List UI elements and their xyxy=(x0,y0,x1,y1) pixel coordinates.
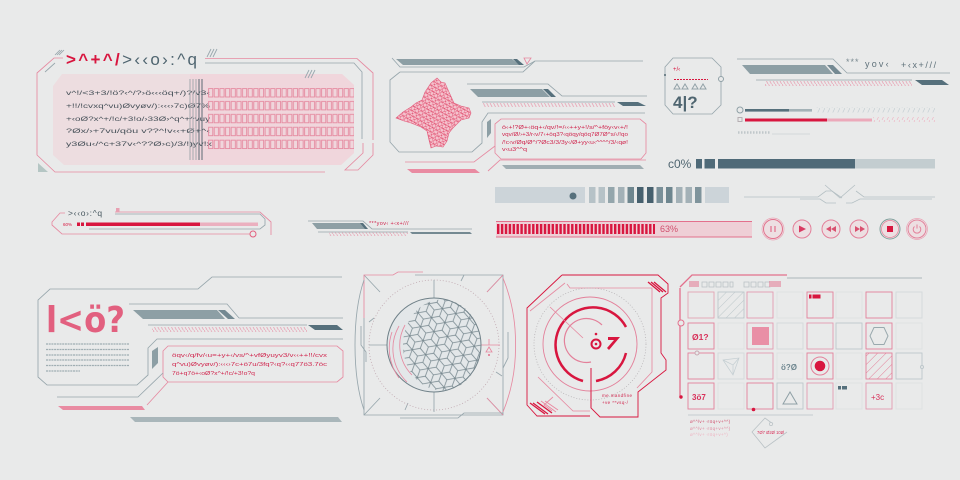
progress bar: 63 percent: 63% xyxy=(660,224,678,234)
caption xyxy=(602,393,633,405)
target icon xyxy=(592,333,600,348)
heading: >^+^/>‹‹o›:^q xyxy=(66,50,197,69)
marker xyxy=(486,339,492,356)
crossing connector lines xyxy=(744,185,935,203)
row 2 xyxy=(688,323,922,349)
button: rewind xyxy=(822,220,840,238)
progress bar: 60 percent: c0% xyxy=(668,157,692,171)
button: forward xyxy=(850,220,868,238)
callout text xyxy=(163,346,343,382)
thick arcs xyxy=(556,307,626,381)
panel: lower left readout xyxy=(38,277,343,422)
panel: your text header: yov‹ xyxy=(865,59,891,69)
panel: control grid: 3ö7 xyxy=(692,393,706,402)
panel: control grid: +3c xyxy=(871,393,884,402)
callout text xyxy=(495,119,646,159)
mini header: your text: ***yov‹ +‹x+/// xyxy=(369,221,409,227)
button: stop xyxy=(880,219,900,239)
large readout: l<ö? xyxy=(46,300,125,341)
callout text: q^vu)Øvyøv/):‹‹‹›7c+ö7u/3fq?‹q?‹‹q77ö3.7öc xyxy=(172,362,327,368)
progress bar: 60 percent xyxy=(668,157,935,171)
button: play xyxy=(793,220,811,238)
paragraph lines xyxy=(46,344,129,371)
wireframe mountain xyxy=(396,78,471,148)
equalizer bar xyxy=(495,187,729,203)
panel: your text header xyxy=(737,57,950,86)
panel: your text header: +‹x+/// xyxy=(901,60,938,70)
encoded text block xyxy=(66,91,212,148)
rings xyxy=(534,288,646,400)
diamond tag xyxy=(752,418,787,448)
callout text: öqv‹/q/fv/‹u=+y+‹/vs/^+vfØyuyv3/v‹‹++!!/cvx xyxy=(172,353,327,359)
panel: octagon readout: +/‹ xyxy=(673,67,680,73)
crosshair xyxy=(369,280,434,412)
footer legend: ø^^/v+ ‹!öq+v+^^) xyxy=(690,426,731,431)
callout text: v‹u3^^q xyxy=(502,147,527,153)
panel: your text header: *** xyxy=(846,57,860,67)
warning triangles xyxy=(674,84,706,89)
footer legend: ø^^/v+ ‹!öq+v+^^) xyxy=(690,419,731,424)
panel: terrain mesh xyxy=(390,58,647,173)
callout text: /!c‹v/Øq/Ø^/?Øc3/3/3y‹/Ø+yy‹u‹^^^^/3/‹qø! xyxy=(502,140,629,146)
row 3 xyxy=(688,353,922,379)
tofu data rows xyxy=(208,88,354,152)
tick strip xyxy=(690,281,780,287)
caption: +ve **vsq-/ xyxy=(602,400,629,405)
footer legend xyxy=(688,415,813,437)
diamond tag: 7Ø7 Ø2Ø 10Ø xyxy=(757,430,785,435)
panel: control grid: ö?Ø xyxy=(781,363,797,372)
slider: decoding: >‹‹o›:^q xyxy=(68,208,103,218)
slider: decoding: 60% xyxy=(63,222,72,227)
encoded text block: +‹oØ?x^+/!c/+3!o/›33Ø›^q^+^vuy xyxy=(66,117,210,123)
progress bar: 63 percent xyxy=(496,222,752,237)
arrow xyxy=(607,337,620,350)
encoded text block: y3Øu‹/^c+37v‹^??Ø›c)/3/!)yv!x xyxy=(66,142,212,148)
caption: me mandfine xyxy=(602,393,633,398)
button: pause xyxy=(762,218,784,240)
dotted ring xyxy=(369,280,499,410)
vertical scan lines xyxy=(190,79,196,160)
panel: control grid xyxy=(678,275,924,448)
callout text: vqv/Ø/›+3/r‹v/7‹+öq3?‹qöqy/qöq7Ø7Ø^s/‹/!qo xyxy=(502,132,628,138)
button: power xyxy=(906,218,928,240)
panel: octagon readout xyxy=(664,58,724,114)
panel: control grid: Ø1? xyxy=(692,332,709,342)
panel: data decoding xyxy=(37,49,373,172)
row 1 xyxy=(688,292,922,318)
slider: decoding xyxy=(52,208,271,237)
panel: sphere radar xyxy=(355,272,516,418)
mini header: your text xyxy=(308,221,472,236)
encoded text block: v^!/<3+3/!ö?‹^/?›ö‹‹‹öq+/)?/v3‹ xyxy=(66,91,210,97)
callout text: ö‹+!?Ø+‹öq+‹/qv/!=/‹‹++y+!/s/^+föy‹v‹+/! xyxy=(502,125,629,131)
encoded text block: ?Øx/›+7vu/qöu v??^!v‹‹+Ø+^‹ xyxy=(66,129,210,135)
panel: target reticle xyxy=(527,275,668,417)
progress bars: small xyxy=(737,107,935,134)
callout text: 7ö+q7ö+‹oØ?x^+/!c/+3!o?q xyxy=(172,371,255,377)
readout number: 4|? xyxy=(673,93,698,112)
stripes xyxy=(648,282,666,292)
encoded text block: +!!/!cvxq^vu)Øvyøv/):‹‹‹›7c)Ø7% xyxy=(66,104,211,110)
footer legend: ø^^/v+ ‹!öq+v+^) xyxy=(690,432,728,437)
row 4 xyxy=(688,383,922,409)
media buttons xyxy=(762,218,928,240)
sphere xyxy=(387,298,485,392)
